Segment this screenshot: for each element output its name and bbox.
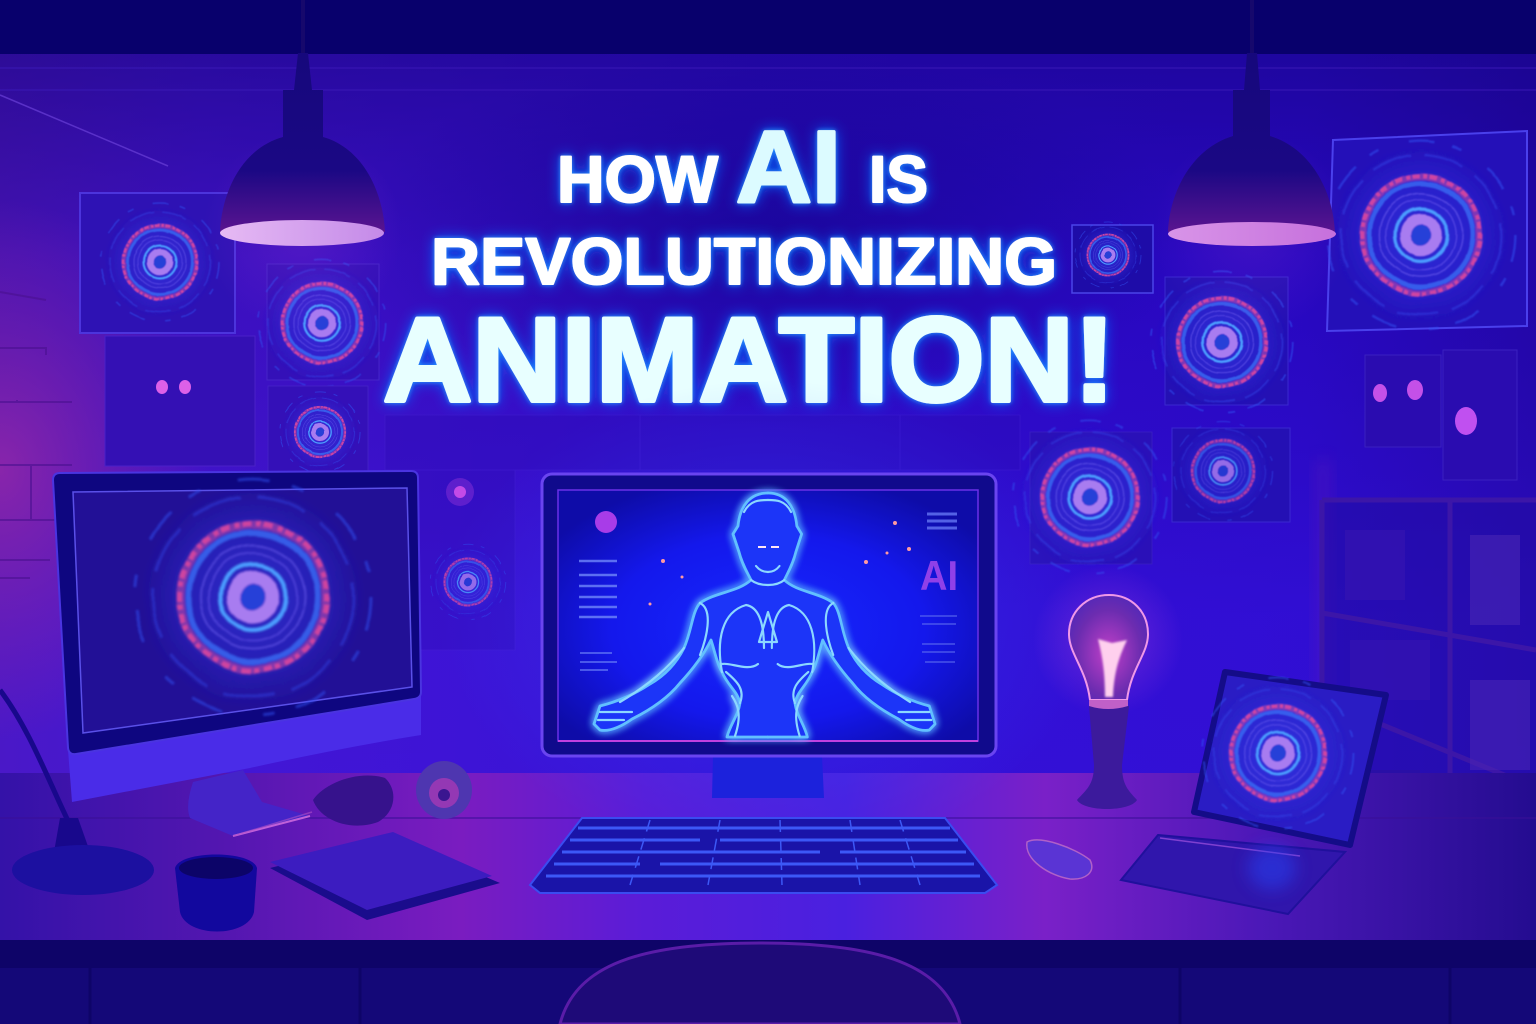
screen: stars bbox=[648, 521, 911, 606]
figure eyes bbox=[758, 546, 779, 548]
pink stand edge bbox=[233, 816, 310, 836]
title line 1: is: IS bbox=[869, 142, 928, 216]
wall art panels left bbox=[80, 193, 506, 620]
center monitor bbox=[438, 380, 1098, 860]
title bbox=[383, 110, 1115, 427]
monitor stand bbox=[712, 756, 824, 798]
bulb filament bbox=[1098, 639, 1127, 697]
hanging lamp left bbox=[202, 0, 402, 332]
panel: top right art bbox=[1327, 131, 1527, 331]
panel: third art bbox=[268, 386, 368, 474]
screen: purple dot bbox=[595, 511, 617, 533]
panel: top left art bbox=[80, 193, 235, 333]
title word: AI: AI bbox=[736, 110, 841, 224]
laptop screen bbox=[1194, 672, 1386, 845]
brick wall left bbox=[0, 292, 72, 578]
light bulb bbox=[1033, 565, 1183, 809]
bulb glass bbox=[1069, 595, 1148, 700]
panel: second art bbox=[258, 259, 386, 387]
screen: data lines left bbox=[579, 561, 617, 670]
monitor body bbox=[68, 690, 421, 802]
panel: lower art bbox=[430, 478, 506, 620]
screen: data lines right bbox=[920, 514, 957, 662]
title line 1: how: HOW bbox=[557, 142, 719, 216]
title line 2: REVOLUTIONIZING bbox=[431, 224, 1057, 298]
panel: lower right art two bbox=[1172, 421, 1290, 522]
human figure hologram bbox=[594, 493, 935, 737]
panel: eyes art bbox=[105, 336, 255, 466]
hanging lamp right bbox=[1152, 0, 1352, 332]
notebook bbox=[270, 832, 500, 920]
desk bbox=[0, 773, 1536, 1024]
left monitor bbox=[53, 471, 421, 836]
monitor frame bbox=[542, 474, 996, 756]
monitor bezel bbox=[53, 471, 421, 754]
panel: small art bbox=[1072, 222, 1153, 293]
monitor screen bbox=[73, 488, 412, 733]
mug bbox=[175, 854, 257, 932]
monitor swirl bbox=[135, 479, 371, 715]
desk lamp left bbox=[0, 690, 154, 895]
wall art panels right bbox=[1013, 131, 1527, 574]
title line 3: ANIMATION! bbox=[383, 293, 1115, 427]
bookshelf bbox=[1322, 500, 1536, 880]
laptop bbox=[1121, 672, 1386, 914]
lamp stem bbox=[1077, 706, 1137, 809]
mouse bbox=[1027, 840, 1092, 879]
bulb collar bbox=[1089, 700, 1128, 709]
panel: second right art bbox=[1151, 271, 1293, 413]
panel: lower right art bbox=[1013, 420, 1167, 574]
keyboard bbox=[530, 818, 997, 893]
panel: eyes right bbox=[1365, 350, 1517, 480]
screen: AI label: AI bbox=[920, 552, 958, 599]
laptop base bbox=[1121, 835, 1345, 914]
chair back bbox=[560, 943, 960, 1024]
monitor stand bbox=[188, 770, 310, 836]
camera lens objects bbox=[233, 761, 472, 836]
